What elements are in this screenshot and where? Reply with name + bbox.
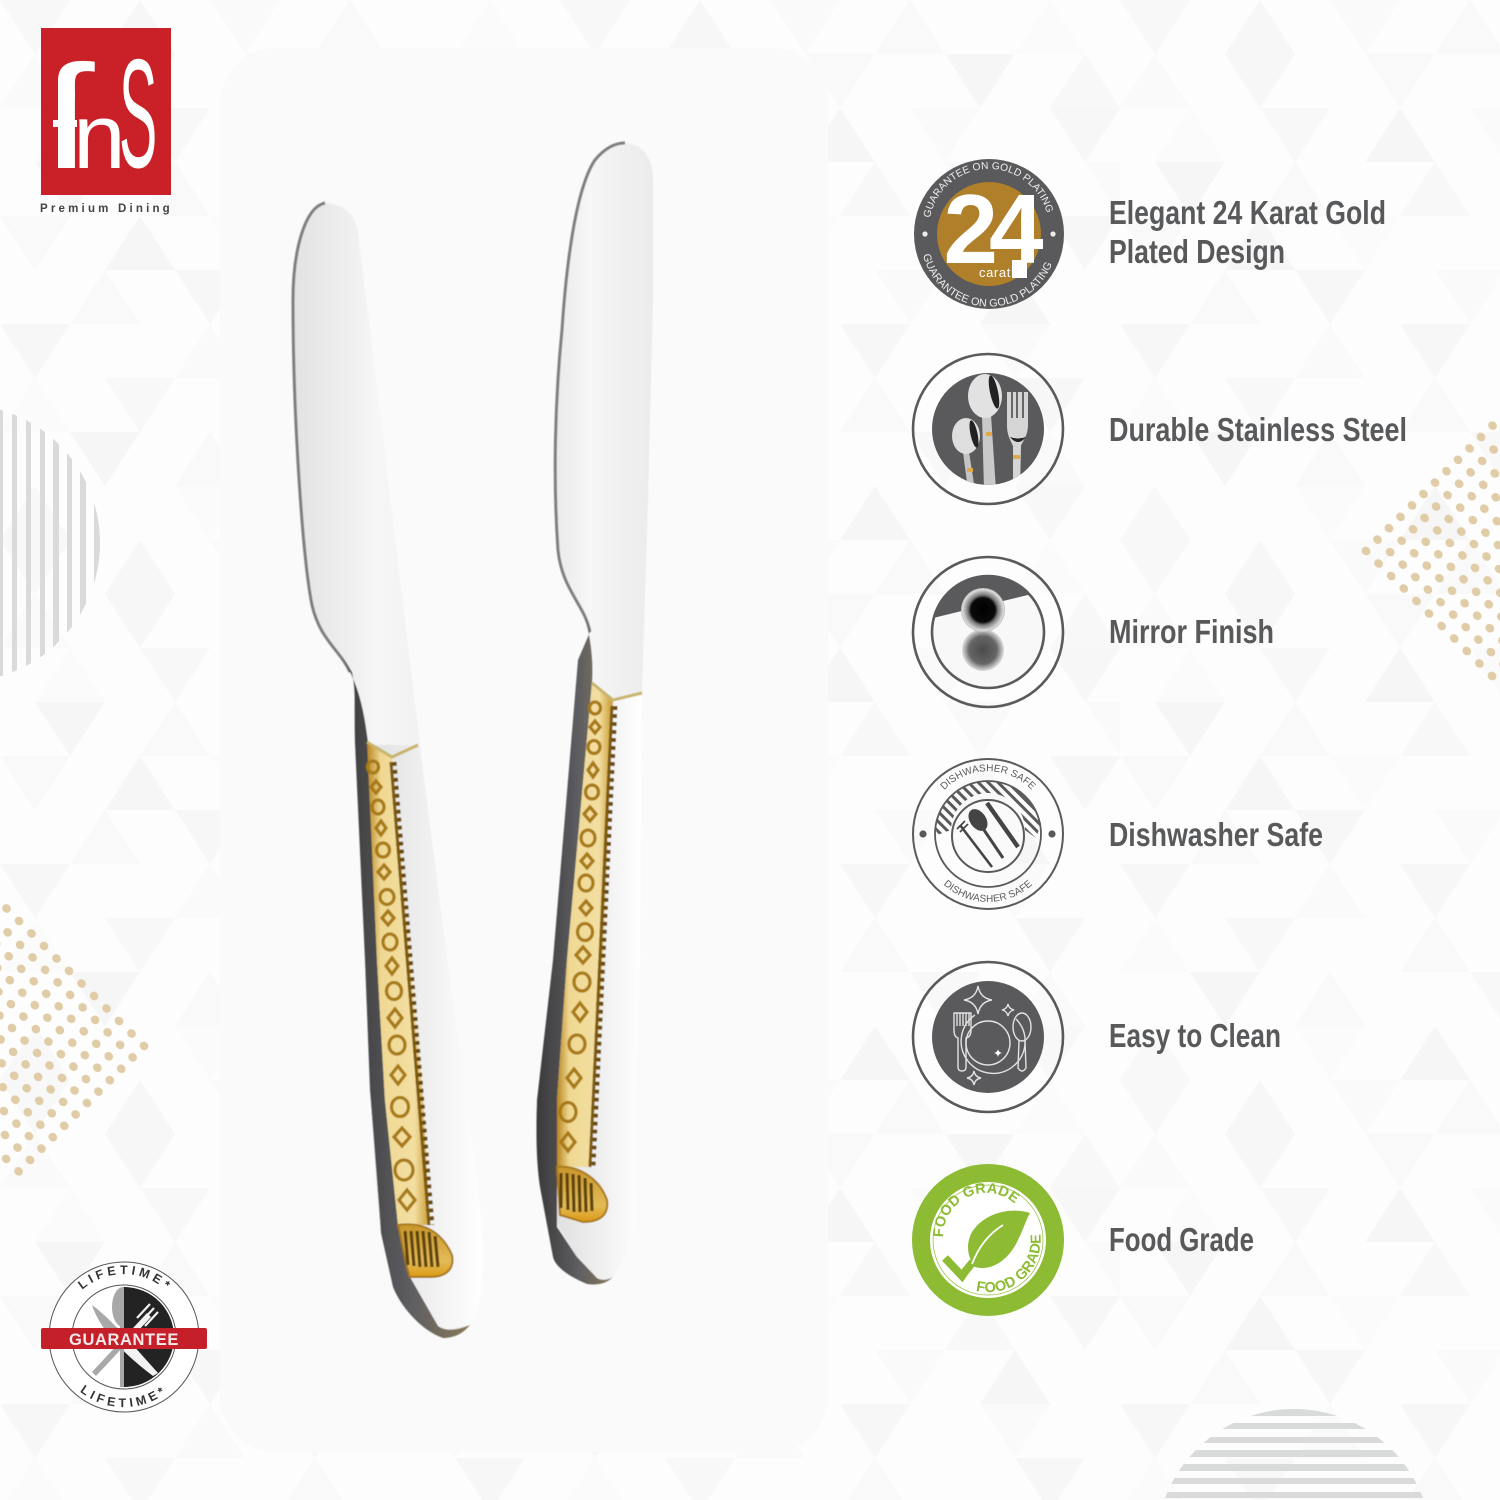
icon: 24 carat gold: carat [979,265,1011,280]
feature text: easy to clean: Easy to Clean [1109,1017,1281,1054]
feature text: food grade: Food Grade [1109,1221,1254,1258]
icon: 24 carat gold: GUARANTEE ON GOLD PLATING [924,162,1053,217]
icon: 24 carat gold [914,159,1064,309]
decoration: bottom striped dome [1165,1409,1423,1498]
icon: mirror finish [913,557,1063,707]
icon: 24 carat gold: GUARANTEE ON GOLD PLATING [924,254,1052,307]
badge: lifetime guarantee: LIFETIME* [78,1265,170,1290]
icon: 24 carat gold: 24 [943,174,1043,284]
icon: food grade [912,1164,1064,1316]
icon: dishwasher safe [912,758,1064,910]
feature text: gold plated: Plated Design [1109,233,1285,270]
feature text: gold plated: Elegant 24 Karat Gold [1109,194,1386,231]
decoration: left striped half circle [0,400,100,690]
logo: FnS Premium Dining [40,26,172,215]
icon: dishwasher safe: DISHWASHER SAFE [944,880,1032,902]
badge: lifetime guarantee [41,1262,207,1412]
product image: left knife [293,203,483,1338]
panel: product background card [220,48,828,1452]
logo: FnS Premium Dining: n [73,84,126,188]
icon: easy to clean [913,962,1063,1112]
product image: right knife [536,143,653,1284]
logo: FnS Premium Dining: S [119,26,157,200]
badge: lifetime guarantee: GUARANTEE [69,1331,179,1349]
icon: stainless steel cutlery [913,354,1063,504]
decoration: right gold dot diamond [1354,414,1500,688]
logo: FnS Premium Dining: f [41,35,95,200]
feature text: gold plated [1109,194,1386,270]
feature text: dishwasher safe: Dishwasher Safe [1109,816,1323,853]
feature text: mirror finish: Mirror Finish [1109,613,1274,650]
icon: food grade: FOOD GRADE [976,1234,1041,1292]
feature text: stainless steel: Durable Stainless Steel [1109,411,1407,448]
logo: FnS Premium Dining: Premium Dining [40,203,172,215]
decoration: left gold dot diamond [0,897,156,1183]
icon: dishwasher safe: DISHWASHER SAFE [940,764,1036,790]
badge: lifetime guarantee: LIFETIME* [80,1384,162,1408]
icon: food grade: FOOD GRADE [933,1183,1020,1236]
